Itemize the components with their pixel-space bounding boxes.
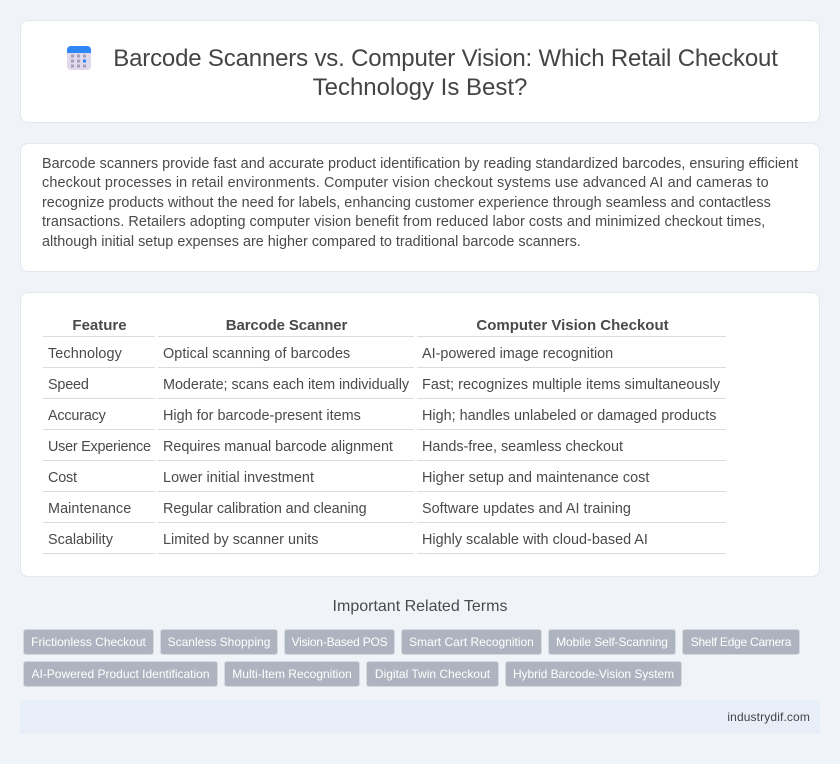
row: accuracy [48, 408, 716, 424]
tag [23, 629, 154, 655]
tag [284, 629, 395, 655]
row: user experience: User Experience [48, 439, 151, 455]
header panel [20, 20, 820, 123]
row: speed [48, 377, 720, 393]
row: maintenance: Software updates and AI training [422, 501, 631, 517]
icon: calendar [67, 46, 91, 70]
tag [682, 629, 800, 655]
table header row [72, 317, 669, 334]
tag: Hybrid Barcode-Vision System [513, 667, 674, 681]
title: Barcode Scanners vs. Computer Vision: Which Retail Checkout [113, 45, 778, 72]
tag: Scanless Shopping [168, 635, 270, 649]
tag: Frictionless Checkout [31, 635, 146, 649]
tag: Mobile Self-Scanning [556, 635, 668, 649]
tag [548, 629, 676, 655]
row: speed: Moderate; scans each item individually [163, 377, 409, 393]
row: technology: Optical scanning of barcodes [163, 346, 350, 362]
row: speed: Speed [48, 377, 89, 393]
row: scalability: Highly scalable with cloud-based AI [422, 532, 648, 548]
row: scalability: Scalability [48, 532, 113, 548]
row: cost [48, 470, 650, 486]
footer bar [20, 700, 820, 734]
tag [160, 629, 278, 655]
related terms tags [23, 629, 800, 687]
title: Technology Is Best? [313, 74, 527, 101]
tag: Vision-Based POS [292, 635, 387, 649]
panel: summary paragraph: although initial setup expenses are higher compared to traditional barcode scanners. [42, 234, 581, 250]
row: accuracy: Accuracy [48, 408, 106, 424]
row: cost: Lower initial investment [163, 470, 314, 486]
row: user experience: Requires manual barcode alignment [163, 439, 393, 455]
row: accuracy: High for barcode-present items [163, 408, 361, 424]
row: maintenance: Regular calibration and cleaning [163, 501, 367, 517]
tag [23, 661, 218, 687]
panel: summary paragraph: Barcode scanners provide fast and accurate product identification by reading standardized barcodes, ensuring efficient [42, 156, 798, 172]
related terms heading: Important Related Terms [333, 598, 507, 615]
row: user experience: Hands-free, seamless checkout [422, 439, 623, 455]
row: speed: Fast; recognizes multiple items simultaneously [422, 377, 720, 393]
title [113, 45, 778, 101]
tag: Multi-Item Recognition [232, 667, 352, 681]
tag [505, 661, 682, 687]
tag [401, 629, 542, 655]
tag: AI-Powered Product Identification [31, 667, 210, 681]
row: cost: Cost [48, 470, 77, 486]
panel: summary paragraph: transactions. Retailers adopting computer vision benefit from reduced labor costs and minimized checkout times, [42, 214, 765, 230]
row: cost: Higher setup and maintenance cost [422, 470, 649, 486]
row: user experience [48, 439, 623, 455]
row: technology: Technology [48, 346, 122, 362]
panel: summary paragraph [20, 143, 820, 272]
tag: Digital Twin Checkout [375, 667, 490, 681]
tag: Smart Cart Recognition [409, 635, 534, 649]
footer credit: industrydif.com [727, 710, 810, 724]
row: technology [48, 346, 613, 362]
tag [224, 661, 360, 687]
table header row: Computer Vision Checkout [476, 317, 669, 334]
row: technology: AI-powered image recognition [422, 346, 613, 362]
row: maintenance: Maintenance [48, 501, 131, 517]
tag: Shelf Edge Camera [691, 635, 791, 649]
row: scalability [48, 532, 648, 548]
table header row: Feature [72, 317, 127, 334]
row: scalability: Limited by scanner units [163, 532, 318, 548]
panel: comparison table [20, 292, 820, 577]
panel: summary paragraph: recognize products without the need for labels, enhancing customer experience through seamless and contactless [42, 195, 771, 211]
tag [366, 661, 499, 687]
row: maintenance [48, 501, 631, 517]
table header row: Barcode Scanner [226, 317, 347, 334]
row: accuracy: High; handles unlabeled or damaged products [422, 408, 716, 424]
panel: summary paragraph: checkout processes in retail environments. Computer vision checkout systems use advanced AI and cameras to [42, 175, 769, 191]
